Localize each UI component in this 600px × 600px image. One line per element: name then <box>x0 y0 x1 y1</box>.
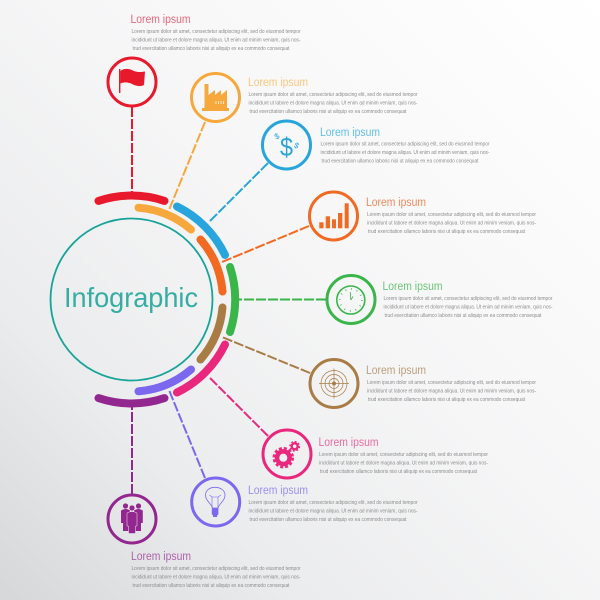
text: item 8 <box>248 485 418 523</box>
icon: gears <box>263 430 311 478</box>
text: item 1: trud exercitation ullamco laboris nisi ut aliquip ex ea commodo consequat <box>132 46 290 52</box>
text: item 3: Lorem ipsum dolor sit amet, consectetur adipiscing elit, sed do eiusmod tempor <box>320 142 490 148</box>
text: item 5: incididunt ut labore et dolore magna aliqua. Ut enim ad minim veniam, quis nos- <box>384 304 553 310</box>
connector lines <box>132 107 326 494</box>
item 2: yellow factory <box>192 74 418 122</box>
icon: target <box>310 360 358 408</box>
text: item 6 <box>366 365 536 403</box>
text: item 1 <box>130 14 301 52</box>
text: item 2: Lorem ipsum dolor sit amet, consectetur adipiscing elit, sed do eiusmod tempor <box>248 92 418 98</box>
text: item 2: Lorem ipsum <box>248 77 308 89</box>
text: item 2 <box>248 77 418 115</box>
text: item 5: trud exercitation ullamco laboris nisi ut aliquip ex ea commodo consequat <box>384 313 542 319</box>
text: item 8: Lorem ipsum dolor sit amet, consectetur adipiscing elit, sed do eiusmod tempor <box>248 500 418 506</box>
item 6: brown target <box>310 360 536 408</box>
item 3: blue dollar <box>262 121 490 169</box>
text: item 5 <box>382 281 553 319</box>
text: item 3 <box>320 127 490 164</box>
text: item 9: incididunt ut labore et dolore magna aliqua. Ut enim ad minim veniam, quis nos- <box>132 574 301 580</box>
text: item 4 <box>366 197 536 235</box>
text: item 9: Lorem ipsum <box>131 551 191 563</box>
central title: Infographic <box>64 282 198 313</box>
text: item 7: Lorem ipsum <box>318 437 378 449</box>
icon: flag <box>108 58 156 106</box>
text: item 1: Lorem ipsum <box>130 14 190 26</box>
icon: clock <box>327 276 375 324</box>
central hub <box>50 218 212 380</box>
icon: bar chart <box>310 192 358 240</box>
text: item 2: trud exercitation ullamco laboris nisi ut aliquip ex ea commodo consequat <box>250 109 407 115</box>
segmented arcs <box>98 196 235 403</box>
text: item 9: trud exercitation ullamco laboris nisi ut aliquip ex ea commodo consequat <box>132 583 290 589</box>
item 9: purple people <box>108 495 301 589</box>
text: item 1: incididunt ut labore et dolore magna aliqua. Ut enim ad minim veniam, quis nos- <box>132 38 301 44</box>
text: item 7: trud exercitation ullamco laboris nisi ut aliquip ex ea commodo consequat <box>320 469 478 475</box>
text: item 8: incididunt ut labore et dolore magna aliqua. Ut enim ad minim veniam, quis nos- <box>248 508 418 514</box>
text: item 1: Lorem ipsum dolor sit amet, consectetur adipiscing elit, sed do eiusmod tempor <box>132 29 301 35</box>
text: item 8: trud exercitation ullamco laboris nisi ut aliquip ex ea commodo consequat <box>250 517 407 523</box>
text: item 7: incididunt ut labore et dolore magna aliqua. Ut enim ad minim veniam, quis nos- <box>319 460 488 466</box>
text: item 3: Lorem ipsum <box>320 127 380 139</box>
item 1: red flag <box>108 14 301 106</box>
icon: dollar <box>262 121 310 169</box>
item 8: violet bulb <box>192 478 418 526</box>
text: item 6: incididunt ut labore et dolore magna aliqua. Ut enim ad minim veniam, quis nos- <box>367 388 536 394</box>
text: item 5: Lorem ipsum dolor sit amet, consectetur adipiscing elit, sed do eiusmod tempor <box>384 296 553 302</box>
item 7: pink gears <box>263 430 488 478</box>
text: item 4: trud exercitation ullamco laboris nisi ut aliquip ex ea commodo consequat <box>368 229 526 235</box>
text: item 6: Lorem ipsum dolor sit amet, consectetur adipiscing elit, sed do eiusmod tempor <box>367 380 536 386</box>
text: item 6: Lorem ipsum <box>366 365 426 377</box>
icon: dollar: $ <box>292 141 301 151</box>
icon: light bulb <box>192 478 240 526</box>
text: item 9 <box>131 551 301 589</box>
icon: people <box>108 495 156 543</box>
central circle <box>50 218 212 380</box>
text: item 7 <box>318 437 488 475</box>
text: item 5: Lorem ipsum <box>382 281 442 293</box>
text: item 6: trud exercitation ullamco laboris nisi ut aliquip ex ea commodo consequat <box>368 397 526 403</box>
text: item 9: Lorem ipsum dolor sit amet, consectetur adipiscing elit, sed do eiusmod tempor <box>132 566 301 572</box>
item 5: green clock <box>327 276 553 324</box>
text: item 4: Lorem ipsum dolor sit amet, consectetur adipiscing elit, sed do eiusmod tempor <box>367 212 536 218</box>
icon: dollar: $ <box>273 131 281 141</box>
icon: factory <box>192 74 240 122</box>
text: item 3: trud exercitation ullamco laboris nisi ut aliquip ex ea commodo consequat <box>322 158 479 164</box>
text: item 7: Lorem ipsum dolor sit amet, consectetur adipiscing elit, sed do eiusmod tempor <box>319 452 488 458</box>
text: item 8: Lorem ipsum <box>248 485 308 497</box>
text: item 4: Lorem ipsum <box>366 197 426 209</box>
text: item 2: incididunt ut labore et dolore magna aliqua. Ut enim ad minim veniam, quis nos- <box>248 100 418 106</box>
item 4: orange bars <box>310 192 536 240</box>
text: item 4: incididunt ut labore et dolore magna aliqua. Ut enim ad minim veniam, quis nos- <box>367 220 536 226</box>
icon: dollar: $ <box>280 132 293 162</box>
text: item 3: incididunt ut labore et dolore magna aliqua. Ut enim ad minim veniam, quis nos- <box>320 150 490 156</box>
